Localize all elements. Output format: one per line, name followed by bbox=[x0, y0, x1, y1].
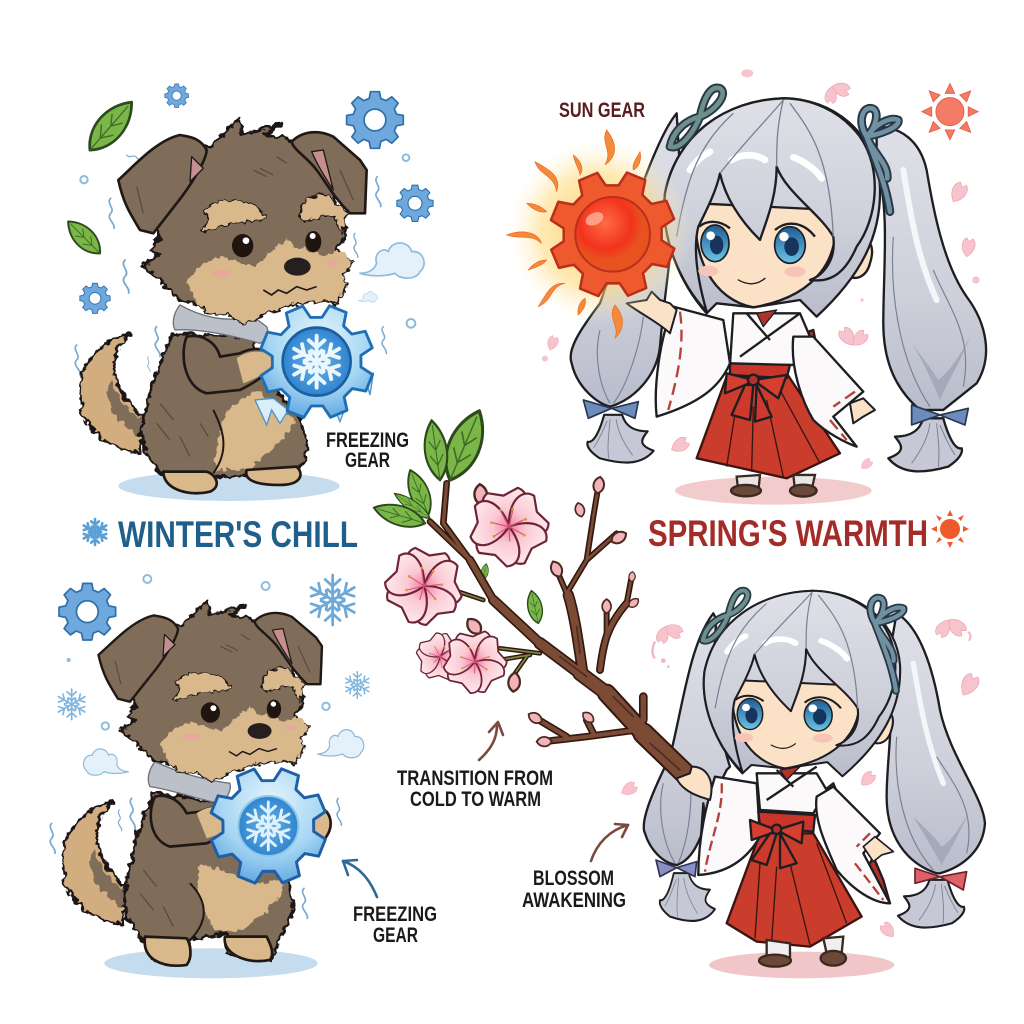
icon: large gear bbox=[59, 583, 116, 640]
label: freezing gear top bbox=[326, 429, 409, 472]
blossom top bbox=[462, 483, 557, 576]
right hand bbox=[863, 837, 893, 862]
dog body bbox=[125, 793, 331, 966]
arrow: transition bbox=[479, 722, 503, 760]
right hair bow bbox=[915, 868, 967, 890]
icon: large gear bbox=[347, 92, 403, 148]
panel: winter dog with gear (bottom left) bbox=[50, 575, 371, 978]
icon: snowflake large bbox=[307, 575, 358, 625]
label: blossom awakening: AWAKENING bbox=[522, 889, 626, 912]
dog tail bbox=[63, 803, 126, 925]
label: blossom awakening: BLOSSOM bbox=[533, 867, 614, 890]
flower buds bbox=[464, 476, 641, 746]
sun glow bbox=[508, 140, 692, 323]
icon: cloud left bbox=[83, 749, 128, 775]
flames bbox=[507, 130, 641, 338]
icon: breath cloud bbox=[360, 243, 424, 278]
left hair bow bbox=[583, 400, 638, 418]
blossom back small bbox=[404, 624, 473, 692]
icon: small gear top bbox=[165, 84, 189, 108]
right pigtail bbox=[877, 127, 986, 410]
right hand bbox=[850, 398, 875, 423]
ground shadow bbox=[675, 477, 872, 505]
falling petals bbox=[542, 69, 980, 472]
right hair bow bbox=[912, 405, 968, 425]
left hair bow bbox=[656, 860, 697, 877]
icon: title snowflake bbox=[82, 519, 108, 545]
panel: winter dog holding freezing gear (top left) bbox=[61, 84, 433, 501]
frost dots bbox=[68, 575, 330, 730]
ground shadow bbox=[709, 952, 894, 978]
icon: freezing gear bbox=[243, 288, 390, 435]
left pigtail tassel bbox=[587, 415, 654, 463]
icon: lower left gear bbox=[80, 283, 110, 313]
ground shadow bbox=[118, 471, 340, 501]
arrow: freezing gear bbox=[343, 860, 377, 897]
shiver lines bbox=[50, 798, 341, 918]
panel: cherry blossom branch bbox=[371, 405, 693, 782]
label: freezing gear top: FREEZING bbox=[326, 429, 409, 452]
icon: snowflake right bbox=[344, 672, 371, 698]
icon: freezing gear bbox=[193, 751, 344, 901]
left pigtail tassel bbox=[660, 873, 715, 921]
shiver lines bbox=[75, 153, 386, 375]
branch outline bbox=[430, 483, 693, 782]
gray scarf bbox=[173, 305, 268, 343]
sandals bbox=[731, 475, 817, 497]
blossom left bbox=[376, 543, 471, 634]
panel: shrine maiden with sun gear (top right) bbox=[507, 69, 986, 505]
hakama skirt bbox=[697, 373, 840, 478]
falling petals bbox=[619, 611, 981, 940]
icon: green leaf large bbox=[80, 94, 141, 159]
right pigtail tassel bbox=[898, 880, 964, 928]
dog tail bbox=[80, 335, 143, 453]
hair ribbons bbox=[703, 591, 904, 691]
label: sun gear: SUN GEAR bbox=[559, 99, 645, 122]
icon: green leaf small bbox=[61, 215, 107, 260]
dog head bbox=[118, 118, 367, 323]
hakama skirt bbox=[727, 833, 862, 947]
right pigtail bbox=[887, 613, 985, 873]
dog body bbox=[140, 333, 308, 493]
label: freezing gear bottom: GEAR bbox=[373, 924, 418, 947]
left pigtail bbox=[644, 613, 730, 865]
label: freezing gear bottom: FREEZING bbox=[353, 903, 437, 926]
icon: small sun bbox=[922, 84, 978, 140]
hand under sun gear bbox=[627, 292, 677, 333]
label: transition from cold to warm: COLD TO WARM bbox=[410, 788, 541, 811]
kimono top bbox=[698, 767, 890, 903]
frost dots bbox=[80, 154, 415, 328]
label: transition from cold to warm: TRANSITION FROM bbox=[397, 767, 553, 790]
branch wood bbox=[430, 483, 693, 782]
kimono top bbox=[656, 307, 863, 447]
dog head bbox=[98, 601, 322, 781]
icon: snowflake left bbox=[56, 689, 87, 720]
leaves bbox=[371, 405, 545, 625]
head and hair bbox=[664, 98, 880, 317]
gray scarf bbox=[148, 762, 230, 803]
head and hair bbox=[704, 591, 900, 776]
icon: small breath puff bbox=[358, 292, 378, 302]
label: blossom awakening bbox=[522, 867, 626, 912]
icon: sun gear bbox=[531, 153, 694, 316]
label: freezing gear top: GEAR bbox=[345, 449, 390, 472]
hair ribbons bbox=[670, 88, 898, 212]
label: transition from cold to warm bbox=[397, 767, 553, 811]
panel: shrine maiden holding branch (bottom right) bbox=[619, 591, 985, 978]
icon: side gear bbox=[397, 185, 433, 221]
ground shadow bbox=[104, 948, 318, 978]
icon: title sun bbox=[931, 510, 969, 548]
sandals bbox=[759, 937, 846, 967]
icicles bbox=[255, 373, 373, 425]
left pigtail bbox=[571, 113, 680, 407]
icon: cloud right bbox=[318, 730, 364, 758]
label: freezing gear bottom bbox=[353, 903, 437, 947]
arrow: blossom awakening bbox=[591, 824, 628, 861]
blossom lower bbox=[439, 630, 511, 699]
right pigtail tassel bbox=[888, 418, 962, 471]
hand gripping branch bbox=[677, 767, 711, 800]
heading: spring's warmth: SPRING'S WARMTH bbox=[648, 513, 928, 554]
heading: winter's chill: WINTER'S CHILL bbox=[118, 514, 358, 555]
